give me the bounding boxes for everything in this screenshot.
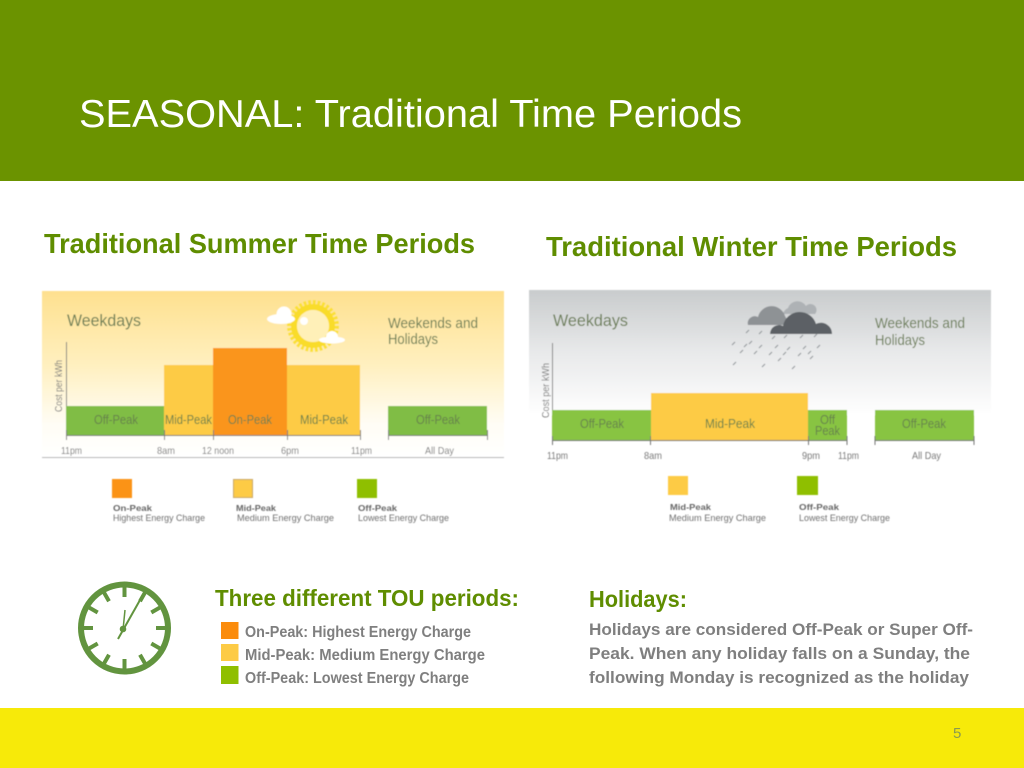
footer band — [0, 708, 1024, 768]
text block: holidays: Peak. When any holiday falls on a Sunday, the — [589, 645, 970, 663]
icon: sun with clouds — [267, 302, 345, 350]
legend item: off-peak — [797, 476, 890, 524]
bar labels: Off-Peak — [94, 413, 139, 427]
label: weekdays: Weekdays — [553, 311, 628, 330]
chart baseline and ticks — [66, 430, 488, 440]
time axis labels: 11pm — [61, 445, 82, 457]
heading: three TOU periods: Three different TOU periods: — [215, 585, 519, 611]
panel: winter chart — [529, 290, 991, 462]
legend item: on-peak: On-Peak — [113, 503, 152, 513]
bar labels: Peak — [815, 424, 841, 438]
label: weekends and holidays: Holidays — [388, 331, 438, 348]
legend item: off-peak: Off-Peak — [358, 503, 397, 513]
bar labels: Off — [820, 413, 835, 427]
bar: weekend off-peak — [875, 410, 974, 440]
list: TOU periods — [221, 622, 485, 687]
bar labels: Mid-Peak — [165, 413, 213, 427]
text block: holidays — [589, 621, 973, 687]
time axis labels: 9pm — [802, 450, 820, 462]
bar: off-peak — [552, 410, 651, 440]
label: weekends and holidays — [875, 315, 965, 349]
bar labels: Off-Peak — [902, 417, 947, 431]
time axis labels: 11pm — [351, 445, 372, 457]
title: SEASONAL: Traditional Time Periods — [79, 93, 742, 136]
y axis — [66, 342, 67, 435]
legend: winter — [668, 476, 890, 524]
legend item: mid-peak — [668, 476, 766, 524]
time axis labels: 8am — [157, 445, 175, 457]
legend item: mid-peak: Mid-Peak — [670, 502, 711, 512]
swatch: mid-peak — [221, 644, 238, 661]
time axis labels — [61, 445, 455, 457]
bar: mid-peak — [287, 365, 360, 435]
legend item: mid-peak: Mid-Peak — [236, 503, 276, 513]
legend: summer — [112, 479, 449, 524]
bar labels: Mid-Peak — [705, 417, 756, 431]
swatch: off-peak — [221, 666, 238, 684]
legend item: off-peak: Lowest Energy Charge — [799, 513, 890, 524]
time axis labels: 6pm — [281, 445, 299, 457]
heading: summer: Traditional Summer Time Periods — [44, 228, 475, 259]
time axis labels: 12 noon — [202, 445, 234, 457]
y axis label: Cost per kWh — [53, 360, 65, 412]
icon: rain clouds — [732, 301, 832, 369]
text block: holidays: Holidays are considered Off-Peak or Super Off- — [589, 621, 973, 639]
legend item: mid-peak: Medium Energy Charge — [237, 513, 334, 524]
chart baseline and ticks — [552, 436, 974, 445]
legend item: on-peak — [112, 479, 205, 524]
text block: holidays: following Monday is recognized as the holiday — [589, 669, 970, 687]
legend item: off-peak: Lowest Energy Charge — [358, 513, 449, 524]
y axis label: Cost per kWh — [540, 363, 552, 418]
bar: mid-peak — [651, 393, 808, 440]
heading: holidays: Holidays: — [589, 586, 687, 612]
heading: winter: Traditional Winter Time Periods — [546, 231, 957, 262]
bar: on-peak — [213, 348, 287, 435]
legend item: mid-peak: Medium Energy Charge — [669, 513, 766, 524]
bar labels — [580, 413, 947, 438]
time axis labels: All Day — [425, 445, 455, 457]
bar: weekend off-peak — [388, 406, 487, 435]
bar labels: Off-Peak — [580, 417, 625, 431]
legend item: on-peak: Highest Energy Charge — [113, 513, 205, 524]
legend item: off-peak — [357, 479, 449, 524]
bar labels: On-Peak — [228, 413, 273, 427]
panel: summer chart — [42, 291, 504, 458]
y axis — [552, 343, 553, 440]
page number: 5 — [953, 725, 961, 742]
bar: off-peak — [66, 406, 164, 435]
time axis labels — [547, 450, 942, 462]
legend item: off-peak: Off-Peak — [799, 502, 839, 512]
bar labels — [94, 413, 461, 427]
time axis labels: 11pm — [838, 450, 859, 462]
time axis labels: All Day — [912, 450, 942, 462]
label: weekdays: Weekdays — [67, 311, 141, 330]
bar: off-peak short — [808, 410, 847, 440]
icon: clock — [81, 584, 168, 672]
text: mid-peak: Mid-Peak: Medium Energy Charge — [245, 647, 485, 664]
time axis labels: 8am — [644, 450, 662, 462]
text: off-peak: Off-Peak: Lowest Energy Charge — [245, 670, 469, 687]
label: weekends and holidays — [388, 315, 478, 348]
bar labels: Off-Peak — [416, 413, 461, 427]
time axis labels: 11pm — [547, 450, 568, 462]
winter background — [529, 290, 991, 415]
header band — [0, 0, 1024, 181]
text: on-peak: On-Peak: Highest Energy Charge — [245, 624, 471, 641]
summer background — [42, 291, 504, 457]
swatch: on-peak — [221, 622, 238, 639]
bar: mid-peak — [164, 365, 213, 435]
summer baseline rule — [42, 457, 504, 458]
label: weekends and holidays: Weekends and — [875, 315, 965, 332]
legend item: mid-peak — [234, 480, 334, 524]
label: weekends and holidays: Holidays — [875, 332, 925, 349]
label: weekends and holidays: Weekends and — [388, 315, 478, 332]
bar labels: Mid-Peak — [300, 413, 349, 427]
